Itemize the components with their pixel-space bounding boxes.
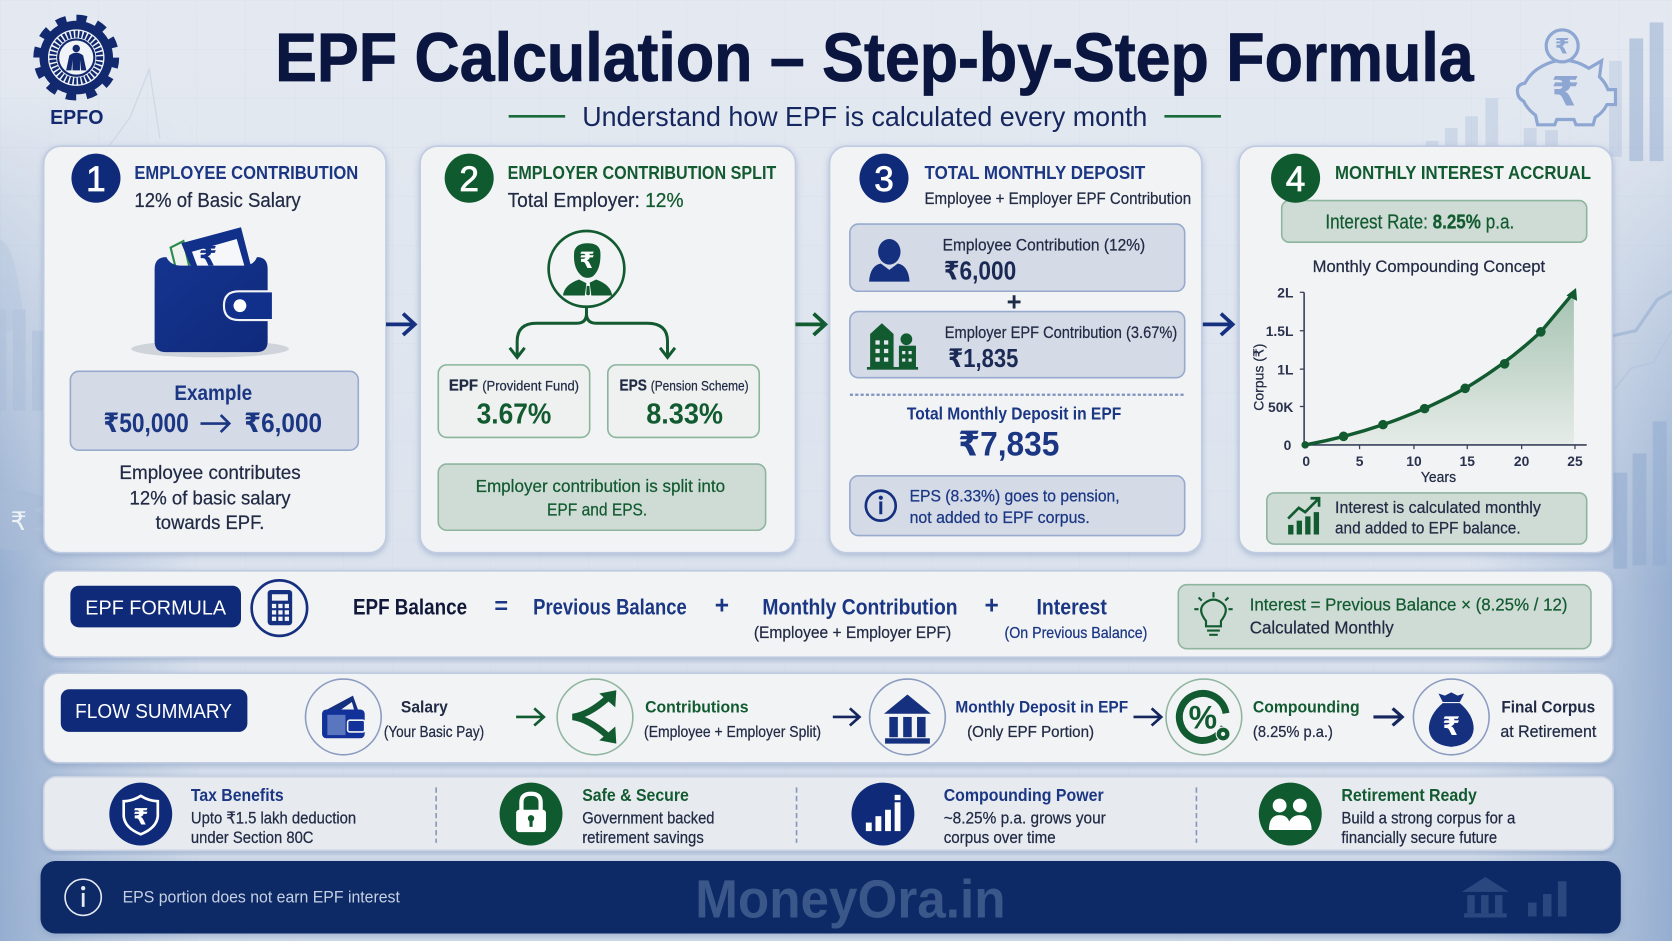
example box: ₹6,000 bbox=[244, 408, 322, 438]
line chart: corpus growth: 50K bbox=[1268, 399, 1293, 415]
panel: 3 total monthly deposit bbox=[830, 146, 1202, 553]
box: employee contribution: ₹6,000 bbox=[944, 258, 1016, 286]
total deposit bbox=[907, 403, 1121, 464]
flow step: compounding: (8.25% p.a.) bbox=[1253, 724, 1333, 741]
box: EPS share: EPS (Pension Scheme) bbox=[620, 377, 749, 394]
flow step: salary: (Your Basic Pay) bbox=[384, 724, 484, 741]
flow step: contributions bbox=[557, 679, 821, 755]
footer bar bbox=[41, 861, 1621, 934]
subheading 3: Employee + Employer EPF Contribution bbox=[925, 189, 1191, 208]
formula text: Previous Balance bbox=[533, 595, 687, 620]
title: EPF Calculation – Step-by-Step Formula bbox=[275, 20, 1475, 96]
split arrows bbox=[510, 307, 675, 357]
callout: interest formula: Interest = Previous Balance × (8.25% / 12) bbox=[1250, 594, 1567, 614]
line chart: corpus growth bbox=[1251, 285, 1587, 486]
label: flow summary bbox=[61, 689, 247, 732]
flow step: final corpus: ₹ bbox=[1442, 713, 1460, 741]
note: interest: Interest is calculated monthly bbox=[1335, 498, 1542, 517]
example box: ₹50,000 bbox=[103, 408, 189, 438]
footer note: EPS portion does not earn EPF interest bbox=[123, 888, 400, 907]
icon: wallet with rupee note bbox=[131, 227, 289, 357]
flow step: compounding bbox=[1166, 679, 1360, 755]
flow step: monthly deposit bbox=[870, 679, 1128, 755]
badge 1: 1 bbox=[86, 160, 106, 199]
benefit: compounding power: Compounding Power bbox=[944, 785, 1104, 805]
logo: EPFO: EPFO bbox=[50, 107, 103, 129]
benefit: compounding power: corpus over time bbox=[944, 828, 1056, 847]
formula text: (On Previous Balance) bbox=[1004, 625, 1147, 642]
label: EPF formula: EPF FORMULA bbox=[85, 598, 227, 620]
box: employer contribution bbox=[850, 312, 1185, 378]
box: EPS share bbox=[608, 365, 759, 437]
note: EPS: EPS (8.33%) goes to pension, bbox=[910, 486, 1120, 505]
benefit: retirement ready: Retirement Ready bbox=[1341, 785, 1477, 805]
arrow bbox=[1134, 708, 1161, 725]
flow step: contributions: Contributions bbox=[645, 698, 749, 717]
box: employee contribution bbox=[850, 224, 1185, 291]
box: employer contribution: Employer EPF Contribution (3.67%) bbox=[945, 323, 1177, 342]
formula text: = bbox=[494, 592, 508, 618]
interest rate box: Interest Rate: 8.25% p.a. bbox=[1325, 211, 1514, 233]
note: employer split bbox=[438, 464, 766, 530]
description 1: towards EPF. bbox=[156, 512, 264, 534]
formula text: + bbox=[985, 592, 999, 619]
logo: EPFO bbox=[37, 19, 115, 129]
plus sign: + bbox=[1007, 288, 1022, 316]
formula text: EPF Balance bbox=[353, 595, 467, 620]
icon: piggy bank: ₹ bbox=[1555, 34, 1570, 58]
arrow: step 2 to 3 bbox=[795, 314, 825, 335]
note: EPS bbox=[850, 476, 1185, 536]
icon: piggy bank: ₹ bbox=[1551, 69, 1579, 115]
badge 1 bbox=[71, 154, 120, 203]
heading 4: MONTHLY INTEREST ACCRUAL bbox=[1335, 162, 1591, 183]
badge 4: 4 bbox=[1286, 160, 1305, 199]
line chart: corpus growth: 2L bbox=[1277, 285, 1294, 301]
arrow bbox=[833, 708, 859, 725]
benefit: tax benefits: Upto ₹1.5 lakh deduction bbox=[191, 809, 356, 828]
note: employer split: EPF and EPS. bbox=[547, 499, 647, 519]
heading 1: EMPLOYEE CONTRIBUTION bbox=[134, 162, 358, 183]
benefit: tax benefits: ₹ bbox=[133, 805, 149, 830]
flow step: final corpus: at Retirement bbox=[1500, 722, 1597, 741]
example box: Example bbox=[174, 381, 252, 405]
panel: flow summary bar bbox=[44, 673, 1613, 763]
line chart: corpus growth: 0 bbox=[1302, 453, 1310, 469]
flow step: salary bbox=[306, 679, 484, 755]
line chart: corpus growth: 1L bbox=[1277, 361, 1294, 377]
description 1 bbox=[119, 462, 301, 534]
flow step: final corpus bbox=[1413, 679, 1597, 755]
flow step: contributions: (Employee + Employer Split) bbox=[644, 724, 821, 741]
icon: calculator bbox=[252, 580, 307, 636]
line chart: corpus growth: 20 bbox=[1514, 453, 1530, 469]
example box bbox=[70, 371, 358, 450]
benefit: safe and secure: retirement savings bbox=[582, 828, 704, 847]
benefit: tax benefits: Tax Benefits bbox=[191, 785, 284, 805]
note: interest bbox=[1267, 493, 1587, 544]
benefit: compounding power bbox=[851, 783, 1106, 847]
heading 3: TOTAL MONTHLY DEPOSIT bbox=[925, 162, 1146, 183]
note: employer split: Employer contribution is split into bbox=[476, 476, 725, 496]
flow step: salary: Salary bbox=[401, 698, 448, 717]
flow step: monthly deposit: Monthly Deposit in EPF bbox=[955, 698, 1128, 717]
benefit: safe and secure: Government backed bbox=[582, 809, 714, 828]
subheading 2: Total Employer: 12% bbox=[508, 190, 684, 212]
description 1: Employee contributes bbox=[119, 462, 301, 484]
benefit: retirement ready: financially secure future bbox=[1341, 828, 1497, 847]
interest rate box bbox=[1282, 201, 1587, 242]
flow step: compounding: % bbox=[1189, 700, 1217, 736]
line chart: corpus growth: Corpus (₹) bbox=[1251, 344, 1267, 411]
panel: 1 employee contribution bbox=[44, 146, 386, 553]
box: employer contribution: ₹1,835 bbox=[948, 345, 1018, 373]
badge 2 bbox=[445, 154, 494, 203]
formula text: Monthly Contribution bbox=[762, 595, 958, 620]
total deposit: ₹7,835 bbox=[958, 426, 1059, 464]
badge 3: 3 bbox=[874, 160, 894, 199]
icon: info bbox=[65, 879, 101, 915]
icon: faint bank and bars bbox=[1462, 877, 1566, 918]
line chart: corpus growth: 25 bbox=[1567, 453, 1583, 469]
arrow bbox=[516, 708, 544, 725]
arrow: step 3 to 4 bbox=[1203, 314, 1233, 335]
formula text: (Employee + Employer EPF) bbox=[754, 623, 951, 642]
formula text: + bbox=[715, 592, 729, 619]
box: employee contribution: Employee Contribution (12%) bbox=[943, 236, 1145, 255]
panel: EPF formula bar bbox=[44, 571, 1612, 657]
arrow: step 1 to 2 bbox=[386, 314, 415, 335]
callout: interest formula bbox=[1178, 585, 1591, 649]
box: EPS share: 8.33% bbox=[646, 399, 723, 431]
badge 3 bbox=[859, 154, 909, 203]
heading 2: EMPLOYER CONTRIBUTION SPLIT bbox=[508, 162, 777, 183]
benefit: compounding power: ~8.25% p.a. grows your bbox=[944, 809, 1106, 828]
benefit: tax benefits bbox=[109, 783, 356, 847]
badge 4 bbox=[1271, 154, 1320, 203]
box: EPF share: 3.67% bbox=[477, 399, 551, 431]
callout: interest formula: Calculated Monthly bbox=[1250, 618, 1394, 638]
benefit: retirement ready: Build a strong corpus for a bbox=[1341, 809, 1516, 828]
total deposit: Total Monthly Deposit in EPF bbox=[907, 403, 1121, 423]
benefit: safe and secure: Safe & Secure bbox=[582, 785, 689, 805]
badge 2: 2 bbox=[459, 160, 479, 199]
formula text: Interest bbox=[1036, 595, 1107, 620]
line chart: corpus growth: 1.5L bbox=[1266, 323, 1294, 339]
benefit: safe and secure bbox=[500, 783, 714, 847]
subtitle: Understand how EPF is calculated every month bbox=[582, 101, 1147, 132]
icon: employer with rupee bbox=[549, 231, 624, 307]
box: EPF share: EPF (Provident Fund) bbox=[449, 377, 579, 394]
label: flow summary: FLOW SUMMARY bbox=[75, 701, 232, 723]
benefit: retirement ready bbox=[1259, 783, 1516, 847]
label: EPF formula bbox=[70, 586, 241, 627]
line chart: corpus growth: 0 bbox=[1284, 437, 1292, 453]
note: interest: and added to EPF balance. bbox=[1335, 518, 1521, 537]
icon: employer with rupee: ₹ bbox=[579, 248, 595, 273]
flow step: compounding: Compounding bbox=[1253, 698, 1360, 717]
flow step: final corpus: Final Corpus bbox=[1501, 698, 1595, 717]
watermark: MoneyOra.in bbox=[695, 871, 1006, 930]
description 1: 12% of basic salary bbox=[130, 488, 291, 510]
panel: 2 employer split bbox=[420, 146, 795, 553]
arrow bbox=[1373, 708, 1402, 725]
panel: benefits bar bbox=[44, 777, 1613, 850]
line chart: corpus growth: 10 bbox=[1406, 453, 1422, 469]
panel: 4 monthly interest accrual bbox=[1239, 146, 1612, 553]
line chart: corpus growth: 15 bbox=[1460, 453, 1475, 469]
line chart: corpus growth: Years bbox=[1421, 469, 1456, 486]
subheading 1: 12% of Basic Salary bbox=[134, 190, 302, 212]
box: EPF share bbox=[438, 365, 590, 437]
benefit: tax benefits: under Section 80C bbox=[191, 828, 314, 847]
formula text bbox=[353, 592, 1147, 642]
note: EPS: not added to EPF corpus. bbox=[910, 508, 1090, 527]
chart title: Monthly Compounding Concept bbox=[1313, 257, 1545, 276]
line chart: corpus growth: 5 bbox=[1356, 453, 1364, 469]
background with faint charts: ₹ bbox=[11, 508, 27, 536]
flow step: monthly deposit: (Only EPF Portion) bbox=[967, 724, 1094, 741]
icon: piggy bank bbox=[1517, 30, 1615, 125]
icon: wallet with rupee note: ₹ bbox=[199, 242, 217, 272]
